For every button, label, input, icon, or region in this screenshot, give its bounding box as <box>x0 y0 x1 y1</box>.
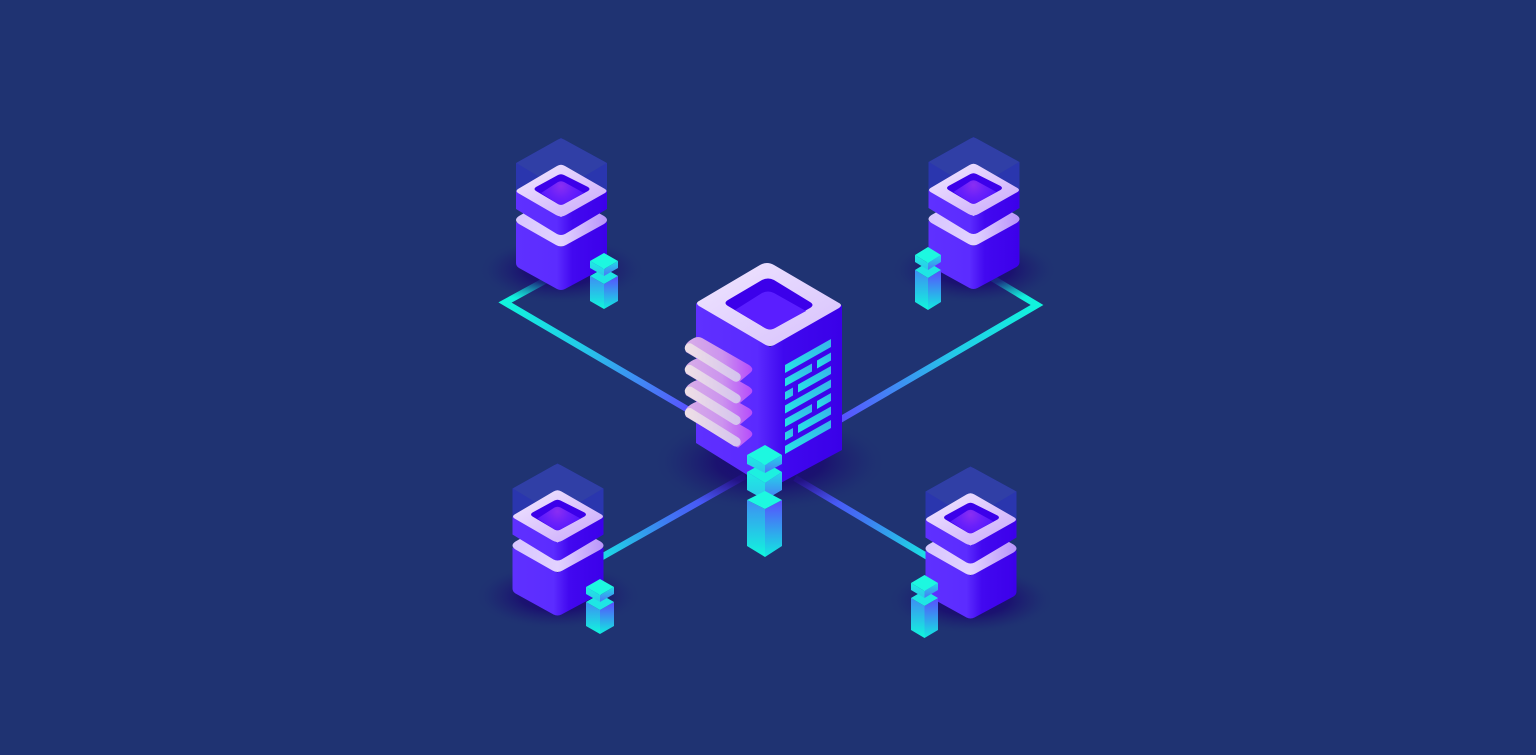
pillar: bottom left node <box>586 579 614 634</box>
node: bottom right <box>911 466 1016 638</box>
fin 1 <box>685 337 752 383</box>
server code panel <box>785 339 831 454</box>
fin 4 <box>685 402 752 448</box>
line: bottom-left node to server <box>600 476 745 558</box>
server body <box>696 303 842 488</box>
pillar: top right node <box>915 247 941 310</box>
line: bottom-right node to server <box>795 478 928 557</box>
line: top-right node to server <box>838 278 1037 421</box>
fin 3 <box>685 380 752 426</box>
central server <box>685 263 842 488</box>
node: top left <box>516 138 618 309</box>
front pillar <box>747 445 782 557</box>
server fins <box>685 337 752 448</box>
pillar: top left node <box>590 253 618 309</box>
fin 2 <box>685 359 752 405</box>
node: top right <box>915 137 1020 310</box>
node: bottom left <box>512 464 614 634</box>
pillar: bottom right node <box>911 575 938 638</box>
ground shadows <box>474 236 1058 634</box>
connection lines <box>505 278 1037 558</box>
server top with recess <box>697 263 841 346</box>
line: top-left node to server <box>505 279 692 412</box>
